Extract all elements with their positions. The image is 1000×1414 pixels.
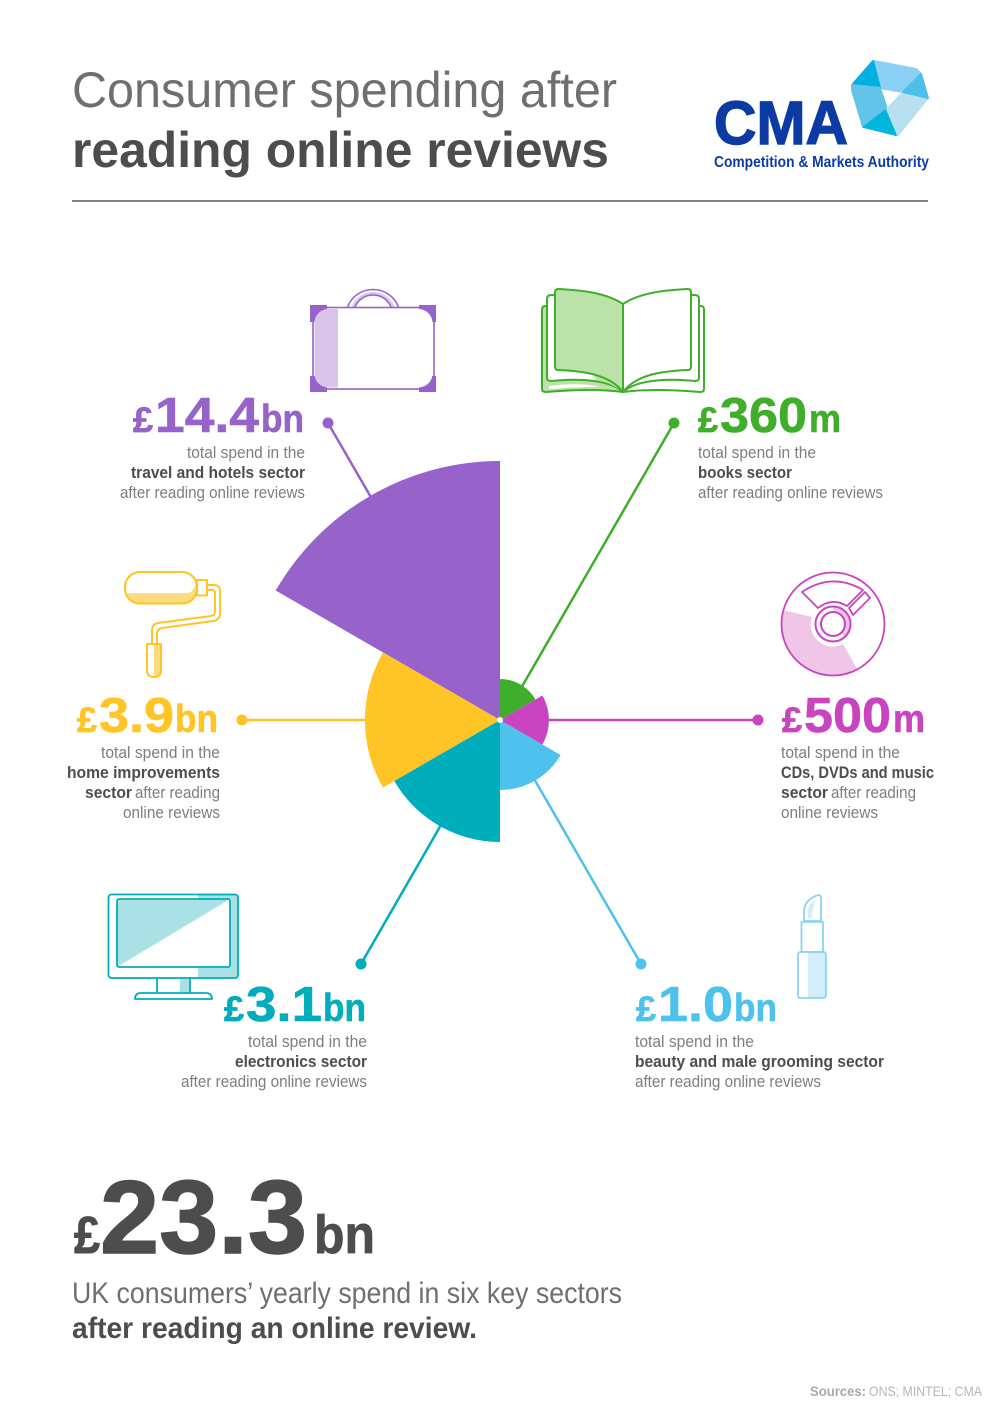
- connector line: home improvements: [236, 714, 370, 726]
- stat: home improvements: total spend in the: [101, 743, 220, 762]
- stat: CDs, DVDs and music: CDs, DVDs and music: [781, 763, 934, 782]
- stat: beauty and male grooming: total spend in the: [635, 1032, 754, 1051]
- icon: book: [542, 289, 704, 392]
- stat: beauty and male grooming: £: [636, 990, 657, 1029]
- stat: travel and hotels: 14.4: [155, 389, 259, 443]
- stat: travel and hotels: [120, 389, 305, 502]
- icon: disc: [781, 572, 884, 676]
- stat: books: £: [698, 401, 719, 440]
- total figure: bn: [314, 1205, 375, 1265]
- stat: home improvements: after reading: [135, 783, 220, 802]
- stat: CDs, DVDs and music: m: [893, 698, 925, 741]
- total figure: £: [74, 1207, 100, 1265]
- stat: electronics: 3.1: [246, 978, 322, 1032]
- stat: books: total spend in the: [698, 443, 816, 462]
- stat: electronics: total spend in the: [248, 1032, 367, 1051]
- connector line: travel: [322, 418, 372, 499]
- stat: home improvements: [67, 689, 220, 822]
- stat: beauty and male grooming: after reading online reviews: [635, 1072, 821, 1091]
- sources: [810, 1383, 983, 1399]
- total description: after reading an online review.: [72, 1312, 477, 1345]
- total figure: 23.3: [100, 1160, 307, 1276]
- connector line: books: [520, 418, 680, 690]
- title: reading online reviews: [72, 122, 609, 178]
- icon: lipstick: [798, 895, 826, 998]
- connector line: electronics: [356, 825, 441, 970]
- logo: CMA: Competition & Markets Authority: [714, 154, 929, 171]
- stat: books: books sector: [698, 463, 792, 482]
- stat: home improvements: online reviews: [123, 803, 220, 822]
- stat: home improvements: bn: [175, 698, 218, 741]
- stat: travel and hotels: total spend in the: [187, 443, 305, 462]
- polar area chart: [276, 461, 561, 842]
- total figure: [74, 1160, 375, 1276]
- stat: books: 360: [720, 389, 807, 443]
- stat: home improvements: £: [77, 701, 98, 740]
- stat: electronics: [181, 978, 367, 1091]
- stat: books: after reading online reviews: [698, 483, 883, 502]
- logo: CMA: CMA: [714, 89, 848, 157]
- sources: Sources:: [810, 1383, 866, 1399]
- stat: books: m: [809, 398, 841, 441]
- icon: suitcase: [310, 289, 436, 392]
- logo: CMA: [714, 61, 929, 171]
- stat: CDs, DVDs and music: online reviews: [781, 803, 878, 822]
- stat: CDs, DVDs and music: sector: [781, 783, 828, 802]
- stat: beauty and male grooming: bn: [734, 987, 777, 1030]
- stat: travel and hotels: £: [133, 401, 154, 440]
- stat: CDs, DVDs and music: after reading: [831, 783, 916, 802]
- stat: electronics: after reading online reviews: [181, 1072, 367, 1091]
- total description: [72, 1277, 622, 1345]
- stat: home improvements: home improvements: [67, 763, 220, 782]
- stat: electronics: bn: [323, 987, 366, 1030]
- stat: home improvements: sector: [85, 783, 132, 802]
- stat: CDs, DVDs and music: 500: [804, 689, 891, 743]
- icon: monitor: [108, 894, 238, 999]
- stat: CDs, DVDs and music: [781, 689, 934, 822]
- connector line: beauty: [533, 777, 646, 970]
- stat: electronics: electronics sector: [235, 1052, 367, 1071]
- stat: books: [698, 389, 883, 502]
- stat: travel and hotels: bn: [261, 398, 304, 441]
- connector line: CDs: [545, 714, 764, 726]
- stat: CDs, DVDs and music: total spend in the: [781, 743, 900, 762]
- icon: paint roller: [125, 572, 220, 677]
- stat: beauty and male grooming: beauty and male grooming sector: [635, 1052, 884, 1071]
- sources: ONS; MINTEL; CMA: [869, 1383, 983, 1399]
- title: [72, 62, 617, 178]
- total description: UK consumers’ yearly spend in six key sectors: [72, 1277, 622, 1310]
- stat: CDs, DVDs and music: £: [782, 701, 803, 740]
- title: Consumer spending after: [72, 62, 617, 118]
- stat: electronics: £: [224, 990, 245, 1029]
- stat: travel and hotels: after reading online reviews: [120, 483, 305, 502]
- stat: travel and hotels: travel and hotels sector: [131, 463, 305, 482]
- stat: home improvements: 3.9: [99, 689, 174, 743]
- stat: beauty and male grooming: [635, 978, 884, 1091]
- stat: beauty and male grooming: 1.0: [658, 978, 733, 1032]
